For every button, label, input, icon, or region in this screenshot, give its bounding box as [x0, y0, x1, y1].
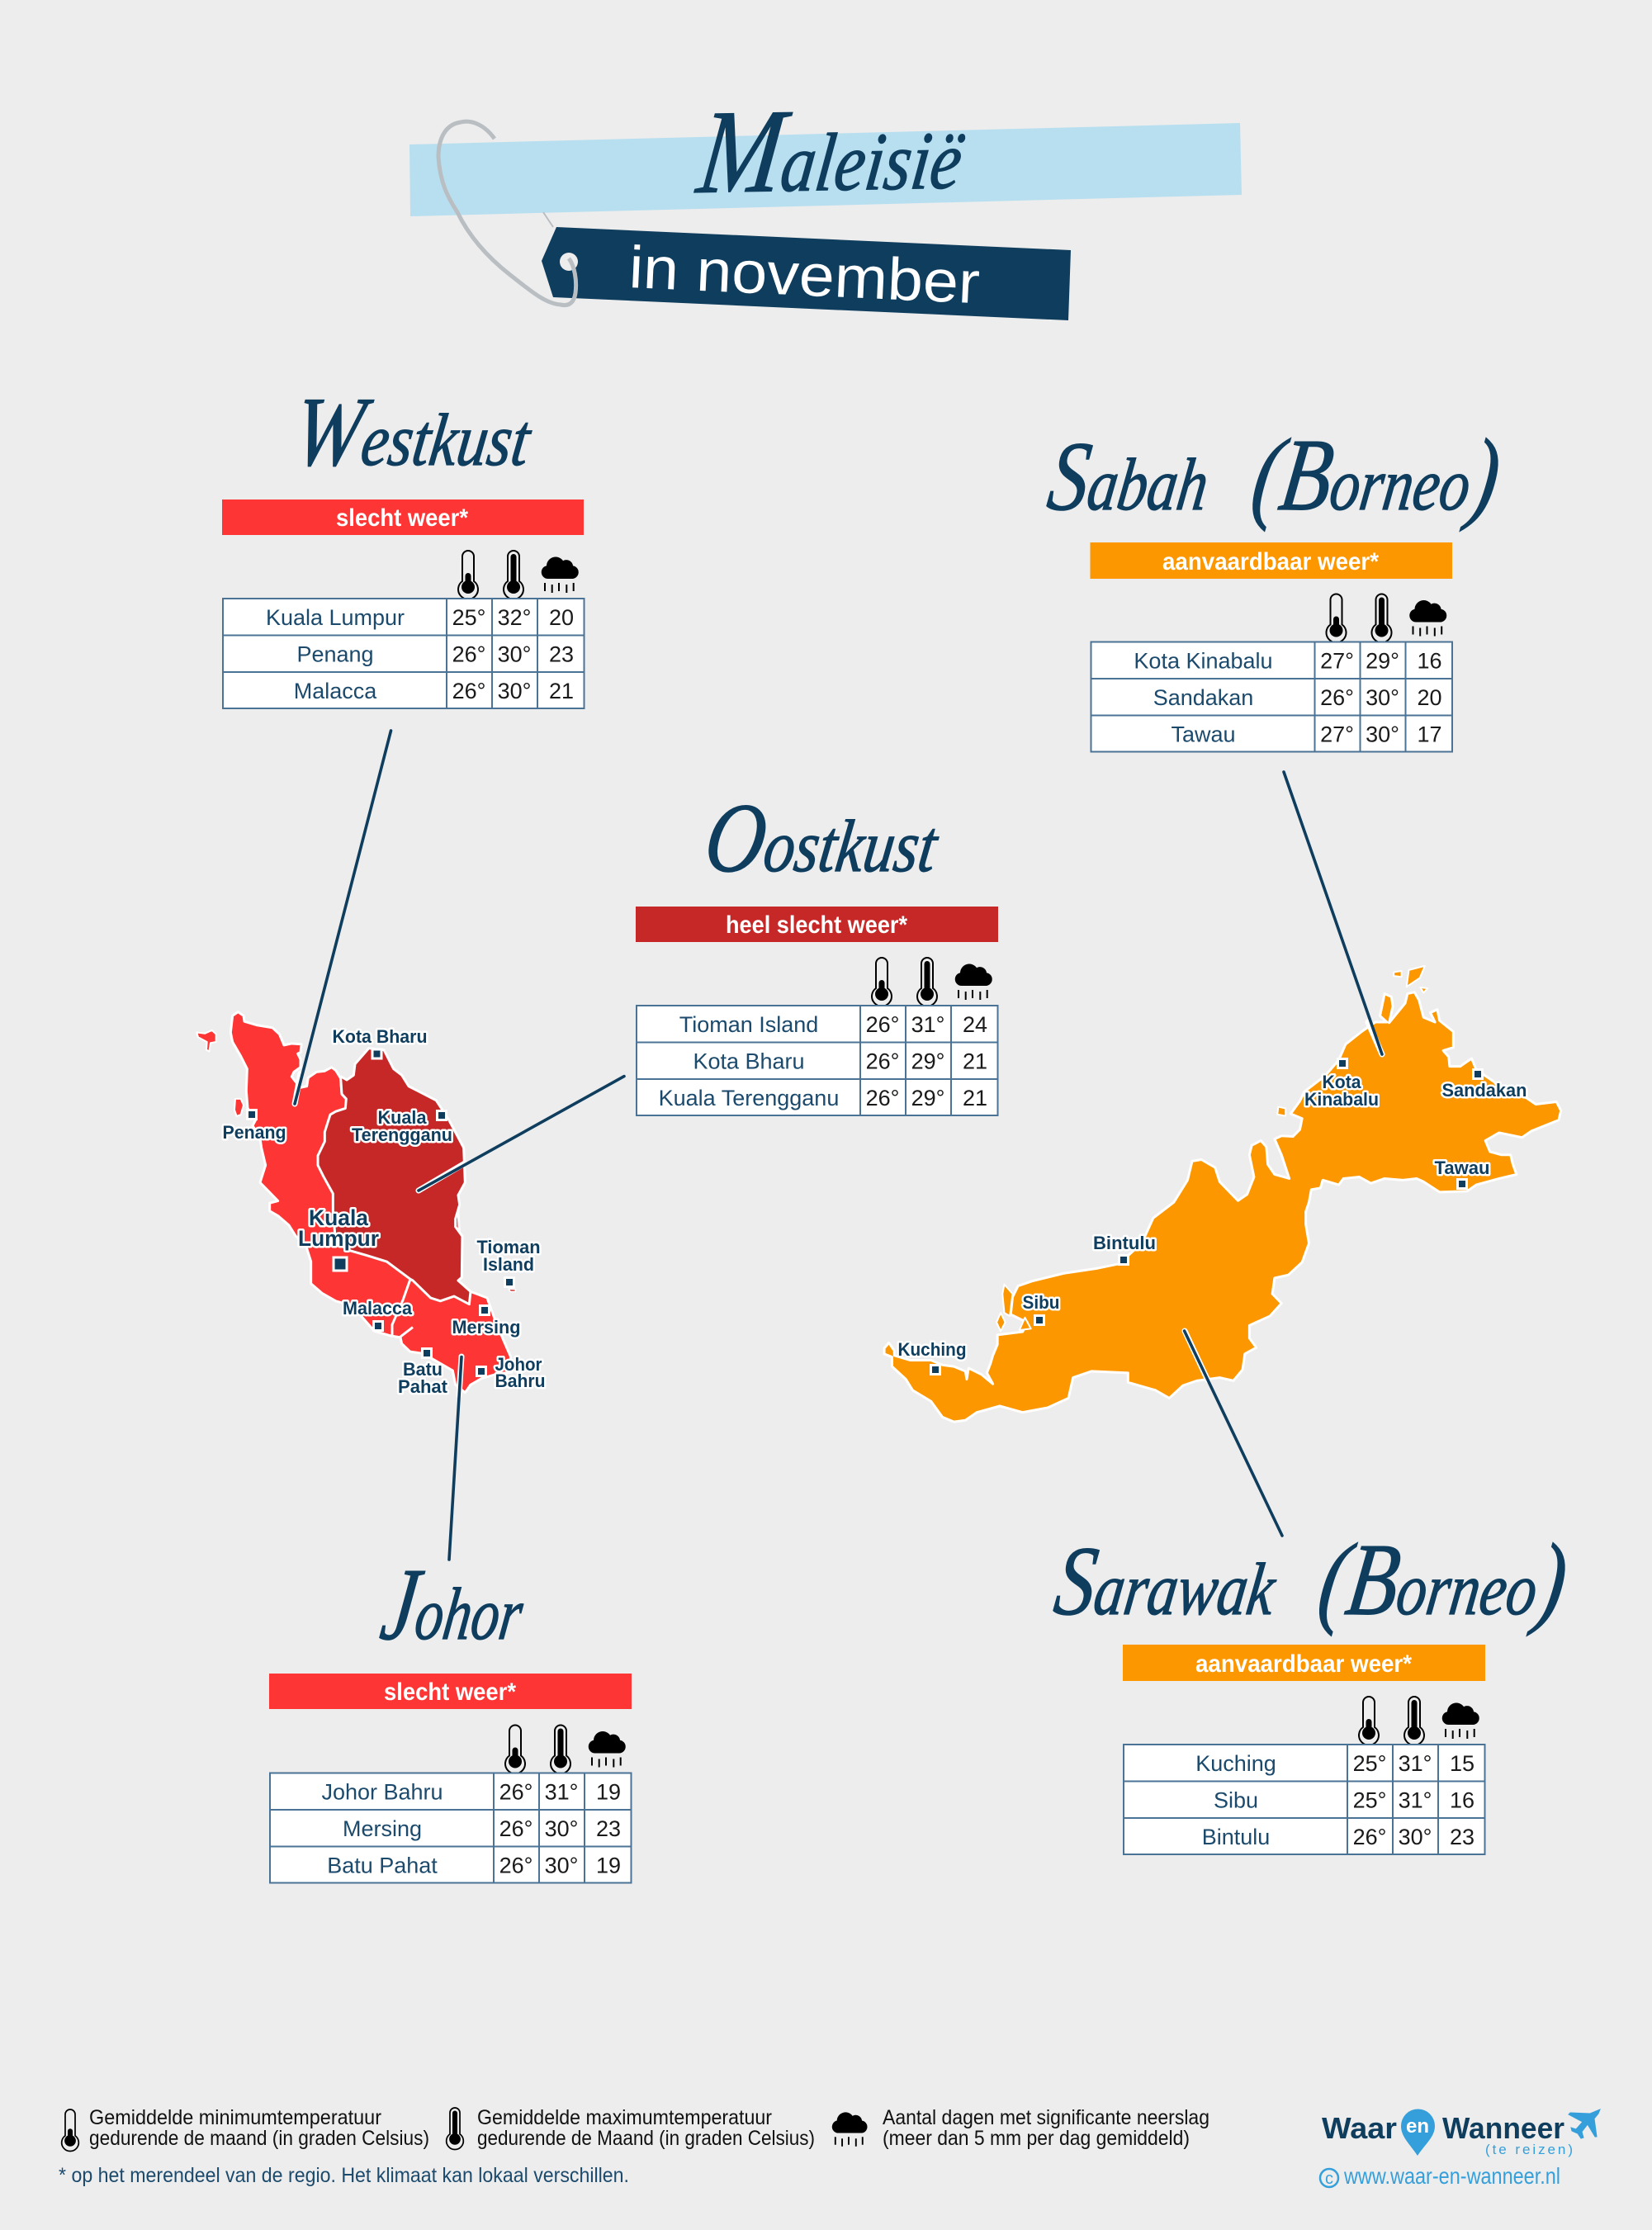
legend: minimum temperature: Gemiddelde minimumtemperatuur — [89, 2106, 381, 2129]
legend: maximum temperature: gedurende de Maand (in graden Celsius) — [477, 2127, 815, 2150]
table: 20 — [1417, 685, 1442, 710]
table: Penang — [296, 642, 374, 667]
table: 16 — [1450, 1788, 1474, 1813]
map labels: peninsula: Kuala — [309, 1205, 369, 1230]
heading: Sabah (Borneo): Sabah (Borneo) — [1042, 419, 1508, 533]
table: Johor Bahru — [321, 1780, 443, 1805]
icon: airplane — [1569, 2109, 1600, 2138]
map labels: peninsula: Lumpur — [298, 1226, 379, 1251]
table: 25° — [452, 605, 485, 630]
table: 26° — [452, 642, 485, 667]
map labels: peninsula: Kuala — [378, 1107, 427, 1128]
table: 30° — [545, 1853, 578, 1877]
map labels: Borneo: Kuching — [898, 1339, 966, 1360]
table — [637, 1006, 997, 1115]
table: 26° — [866, 1012, 899, 1037]
map labels: peninsula: Johor — [495, 1354, 542, 1375]
title tag: in november — [438, 121, 1071, 320]
icons — [872, 958, 992, 1006]
pointer lines — [295, 731, 1382, 1560]
table: 21 — [963, 1086, 987, 1110]
legend: minimum temperature — [62, 2106, 429, 2152]
table: 26° — [866, 1086, 899, 1110]
table: Sibu — [1214, 1788, 1258, 1813]
panel: Sarawak (Borneo) — [1048, 1523, 1574, 1854]
table: Mersing — [343, 1816, 422, 1841]
table: 20 — [549, 605, 574, 630]
table: 21 — [549, 679, 574, 703]
table: 30° — [1399, 1825, 1432, 1849]
logo: Waar en Wanneer — [1322, 2109, 1600, 2157]
table: 19 — [596, 1780, 621, 1805]
legend: maximum temperature — [447, 2106, 815, 2150]
table: 23 — [1450, 1825, 1474, 1849]
map labels: peninsula — [223, 1026, 545, 1397]
rating bar: aanvaardbaar weer* — [1162, 548, 1379, 575]
legend: maximum temperature: Gemiddelde maximumtemperatuur — [477, 2106, 772, 2129]
table: 26° — [499, 1853, 533, 1877]
table: 27° — [1320, 649, 1354, 674]
map labels: Borneo: Sibu — [1022, 1292, 1060, 1313]
table — [223, 599, 585, 708]
table — [270, 1773, 631, 1882]
table: Tawau — [1171, 722, 1236, 746]
map labels: Borneo: Bintulu — [1093, 1233, 1156, 1253]
table: Sandakan — [1153, 685, 1253, 710]
table: 25° — [1353, 1788, 1386, 1813]
heading: Westkust: Westkust — [287, 378, 539, 487]
table: 25° — [1353, 1751, 1386, 1776]
map labels: Borneo: Tawau — [1435, 1158, 1489, 1178]
footnote: * op het merendeel van de regio. Het klimaat kan lokaal verschillen. — [59, 2164, 629, 2187]
table: 27° — [1320, 722, 1354, 746]
table: 24 — [963, 1012, 987, 1037]
table: 30° — [545, 1816, 578, 1841]
legend: precipitation — [832, 2106, 1209, 2150]
table: 26° — [1320, 685, 1354, 710]
icons — [505, 1726, 626, 1773]
panel: Oostkust — [636, 784, 998, 1115]
map labels: peninsula: Penang — [223, 1122, 286, 1143]
table: 30° — [498, 642, 531, 667]
rating bar — [1123, 1645, 1485, 1681]
heading: Johor: Johor — [375, 1548, 532, 1662]
map labels: peninsula: Terengganu — [352, 1124, 452, 1145]
table: 30° — [1366, 685, 1399, 710]
table: 29° — [1366, 649, 1399, 674]
panel: Sabah (Borneo) — [1042, 419, 1508, 751]
logo: Waar en Wanneer: Wanneer — [1442, 2111, 1564, 2145]
table: 31° — [1399, 1751, 1432, 1776]
icon: location pin — [1401, 2109, 1435, 2156]
legend: precipitation: Aantal dagen met significante neerslag — [883, 2106, 1209, 2129]
map labels: Borneo: Kota — [1323, 1072, 1361, 1092]
title banner: Maleisië — [409, 81, 1242, 219]
table: Bintulu — [1202, 1825, 1270, 1849]
map labels: peninsula: Kota Bharu — [332, 1026, 428, 1047]
rating bar — [269, 1674, 632, 1709]
heading: Sarawak (Borneo): Sarawak (Borneo) — [1048, 1523, 1574, 1637]
heading: Oostkust: Oostkust — [698, 784, 946, 893]
table: 23 — [596, 1816, 621, 1841]
table: 26° — [866, 1049, 899, 1073]
table — [1091, 642, 1452, 751]
table: 29° — [911, 1086, 944, 1110]
legend: minimum temperature: gedurende de maand (in graden Celsius) — [89, 2127, 429, 2150]
rating bar: slecht weer* — [336, 504, 468, 532]
table: Kota Kinabalu — [1134, 649, 1273, 674]
table: 26° — [499, 1816, 533, 1841]
table: Kuala Lumpur — [266, 605, 405, 630]
title banner: Maleisië: Maleisië — [690, 81, 973, 219]
city markers — [248, 1049, 1483, 1375]
table — [1124, 1745, 1484, 1854]
map labels: Borneo: Kinabalu — [1304, 1089, 1379, 1110]
map labels: peninsula: Malacca — [343, 1298, 413, 1319]
table: 32° — [498, 605, 531, 630]
panel: Johor — [269, 1548, 632, 1882]
table: 16 — [1417, 649, 1442, 674]
icons — [458, 551, 579, 599]
logo: Waar en Wanneer: Waar — [1322, 2111, 1397, 2145]
rating bar — [222, 500, 584, 535]
logo: Waar en Wanneer: (te reizen) — [1485, 2142, 1573, 2157]
rating bar: slecht weer* — [384, 1678, 516, 1706]
icons — [1359, 1697, 1479, 1745]
icons — [1326, 594, 1446, 642]
table: 29° — [911, 1049, 944, 1073]
table: Kuching — [1195, 1751, 1276, 1776]
map labels: peninsula: Island — [483, 1254, 534, 1275]
map labels: peninsula: Batu — [403, 1359, 443, 1380]
rating bar: heel slecht weer* — [726, 911, 907, 939]
table: 15 — [1450, 1751, 1474, 1776]
panel: Westkust — [222, 378, 585, 708]
title tag: in november: in november — [627, 234, 981, 316]
map labels: Borneo — [898, 1072, 1527, 1360]
legend: precipitation: (meer dan 5 mm per dag gemiddeld) — [883, 2127, 1190, 2150]
logo: Waar en Wanneer: en — [1406, 2115, 1429, 2138]
map: Peninsular Malaysia — [196, 1012, 515, 1393]
map labels: peninsula: Tioman — [477, 1237, 540, 1257]
table: Kuala Terengganu — [659, 1086, 839, 1110]
table: 21 — [963, 1049, 987, 1073]
table: 31° — [545, 1780, 578, 1805]
table: 31° — [1399, 1788, 1432, 1813]
map: Malaysian Borneo — [884, 966, 1561, 1422]
rating bar: aanvaardbaar weer* — [1195, 1650, 1412, 1678]
website credit: c — [1325, 2170, 1333, 2188]
map labels: peninsula: Bahru — [495, 1371, 545, 1391]
rating bar — [636, 907, 998, 942]
table: 23 — [549, 642, 574, 667]
table: Batu Pahat — [327, 1853, 438, 1877]
table: 31° — [911, 1012, 944, 1037]
table: 19 — [596, 1853, 621, 1877]
website credit: www.waar-en-wanneer.nl — [1343, 2163, 1560, 2189]
table: 17 — [1417, 722, 1442, 746]
map labels: Borneo: Sandakan — [1441, 1080, 1527, 1101]
map labels: peninsula: Mersing — [452, 1317, 520, 1338]
table: 26° — [452, 679, 485, 703]
table: Malacca — [294, 679, 377, 703]
table: 30° — [498, 679, 531, 703]
table: 30° — [1366, 722, 1399, 746]
table: Kota Bharu — [693, 1049, 805, 1073]
rating bar — [1090, 542, 1452, 579]
table: 26° — [499, 1780, 533, 1805]
map labels: peninsula: Pahat — [398, 1376, 448, 1397]
table: Tioman Island — [679, 1012, 818, 1037]
table: 26° — [1353, 1825, 1386, 1849]
